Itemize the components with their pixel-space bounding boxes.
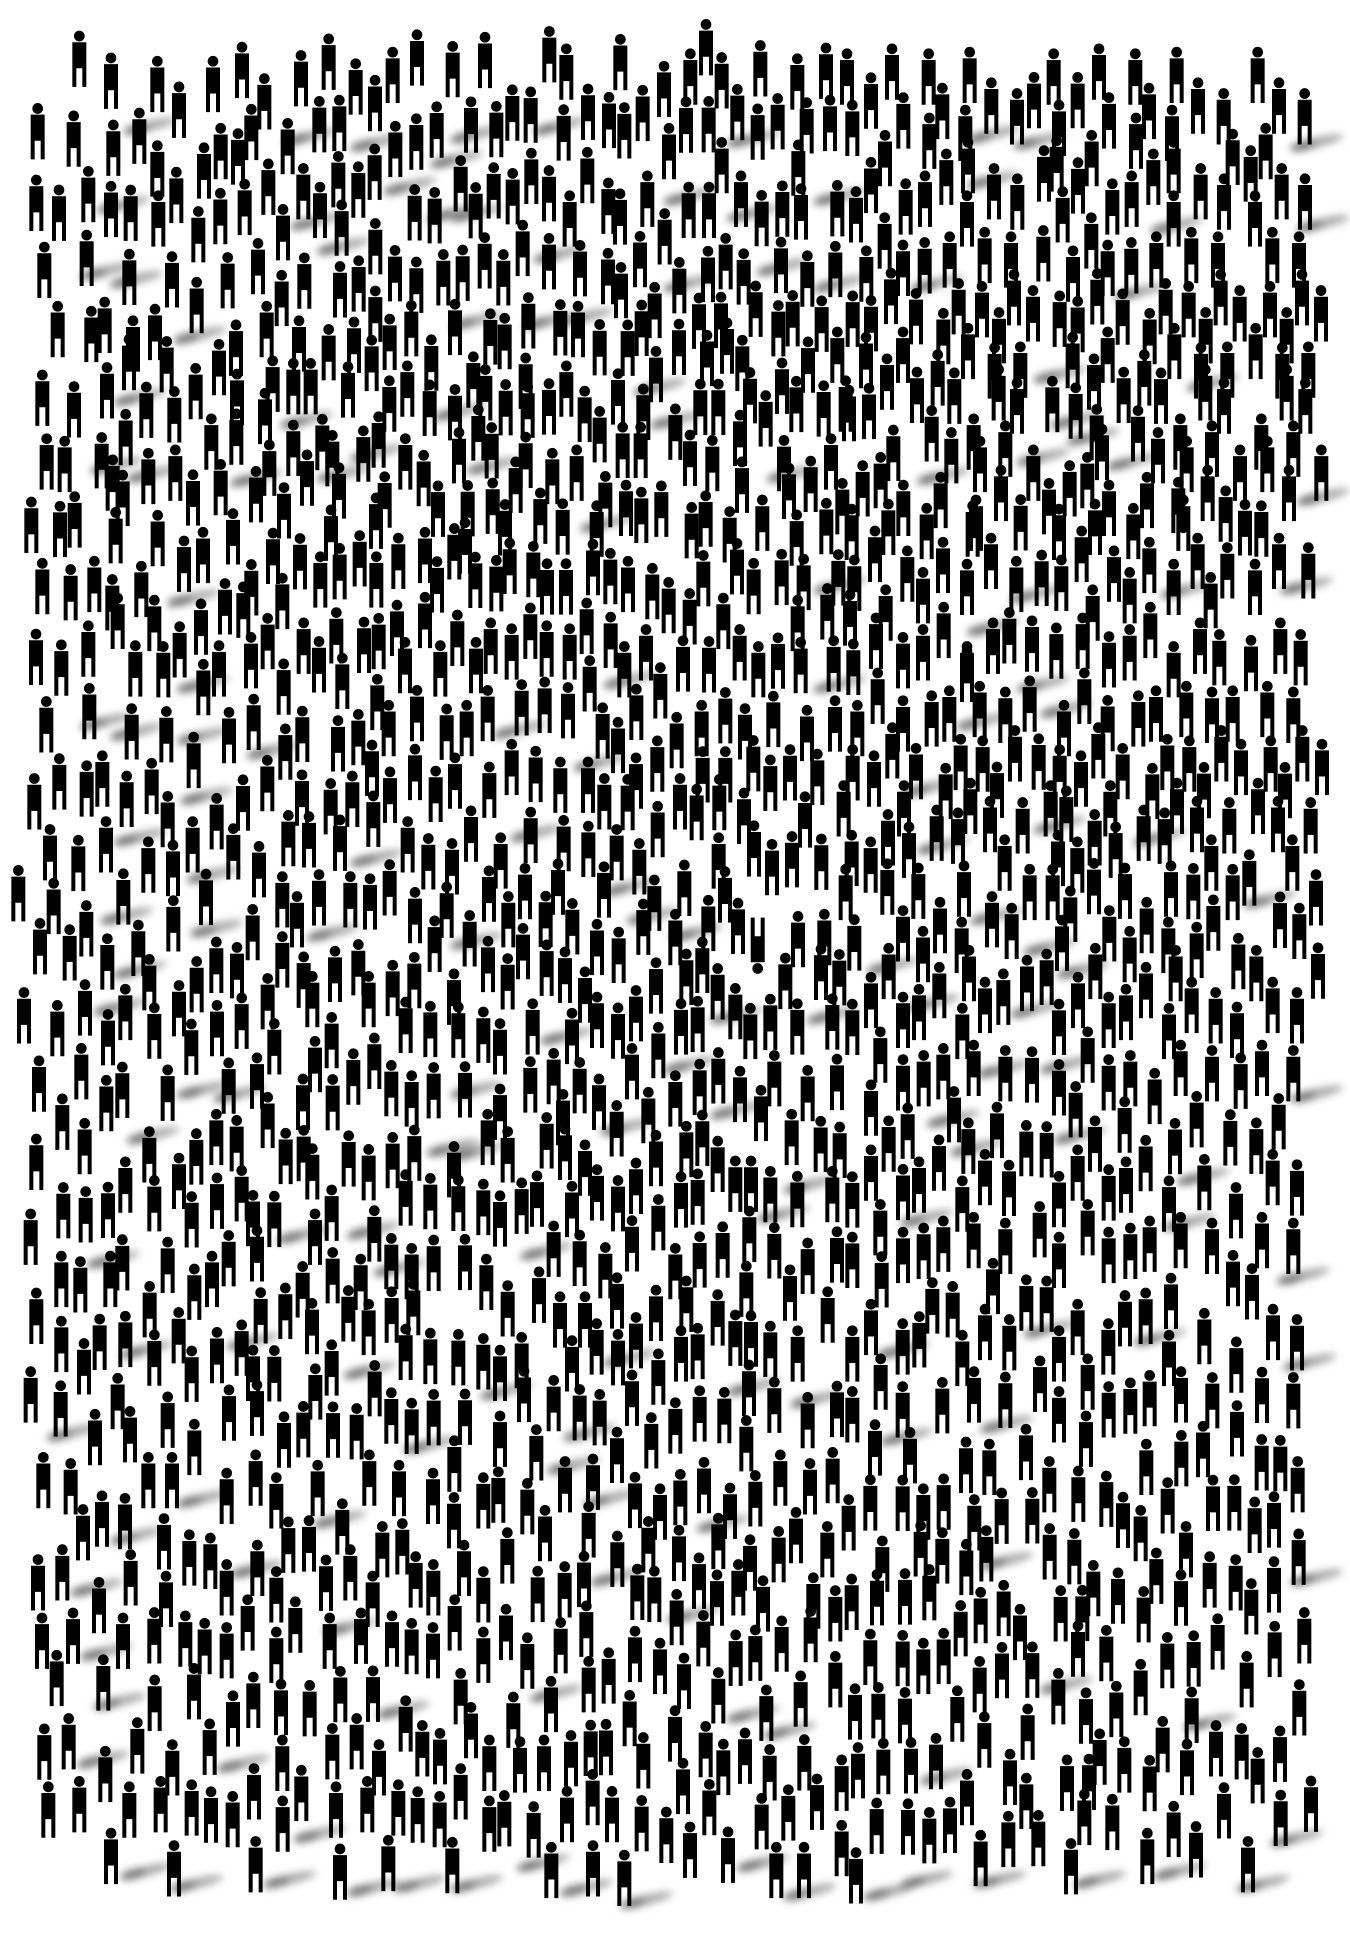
people: top centre bbox=[453, 24, 893, 647]
upside-down person bbox=[757, 968, 759, 970]
people: top left bbox=[31, 35, 443, 647]
people: top right bbox=[903, 49, 1321, 647]
people: bottom centre bbox=[452, 1304, 883, 1855]
people: middle right bbox=[903, 651, 1322, 1296]
people: middle left bbox=[18, 658, 447, 1293]
people: bottom right bbox=[903, 1304, 1311, 1844]
people: middle centre bbox=[452, 661, 892, 1297]
people: bottom left bbox=[31, 1303, 440, 1849]
